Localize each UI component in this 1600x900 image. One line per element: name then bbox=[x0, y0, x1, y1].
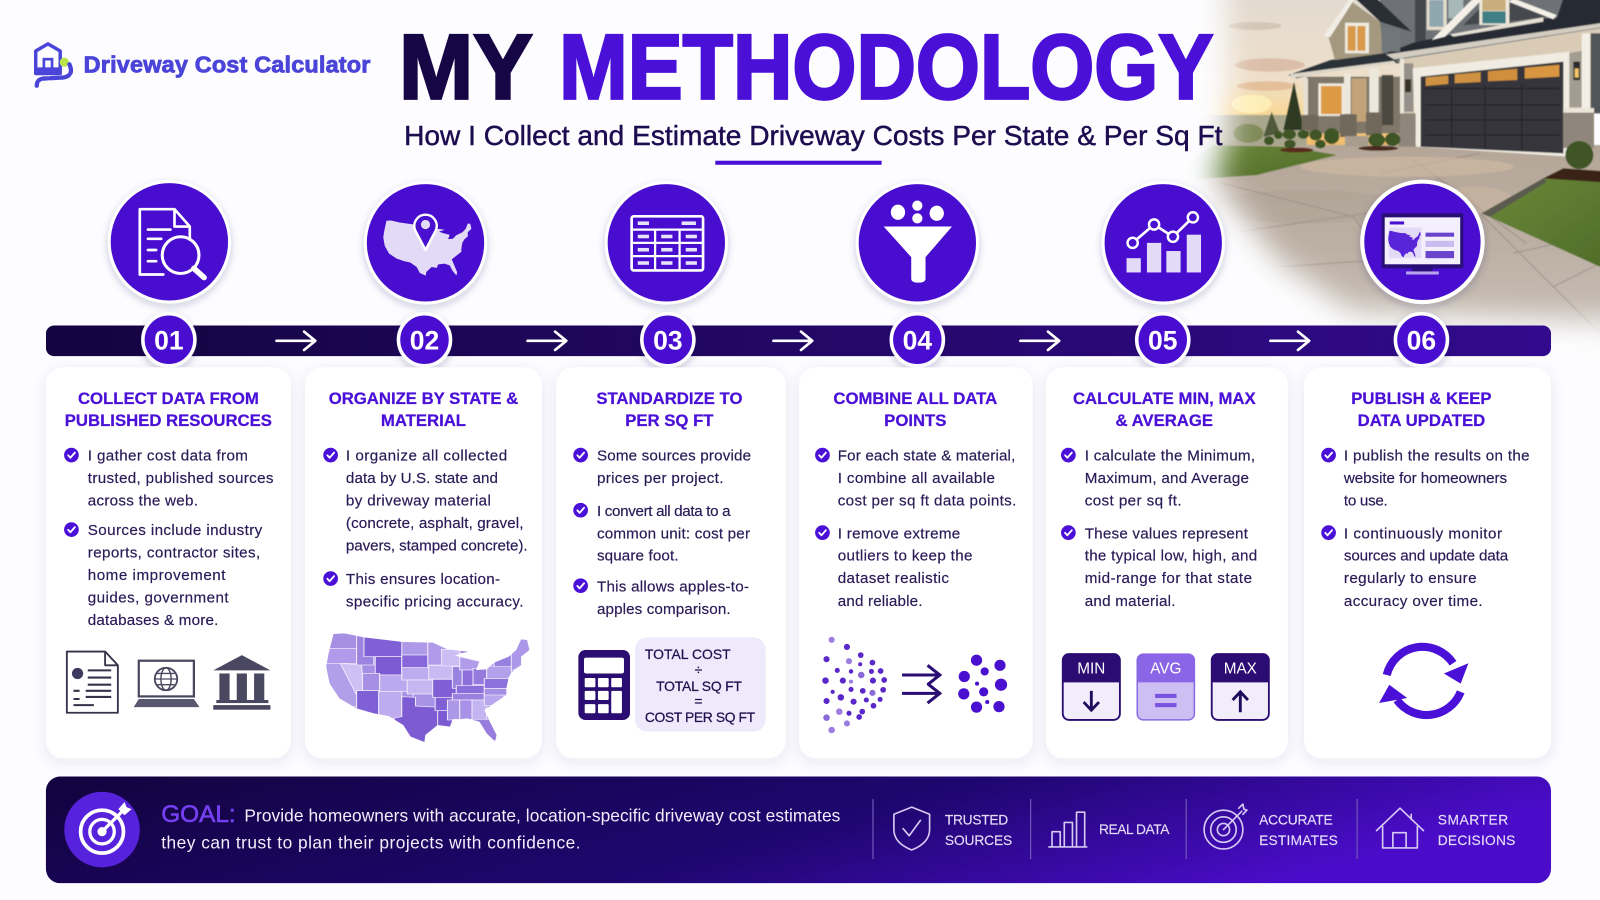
heading: COLLECT DATA FROM bbox=[78, 389, 259, 408]
MIN card bbox=[1063, 654, 1120, 720]
driveway bbox=[1200, 144, 1600, 338]
upper house wall bbox=[1380, 0, 1600, 63]
bullets: home improvement bbox=[88, 567, 226, 584]
panel: step 2 organize bbox=[305, 367, 542, 758]
photo: house and driveway at sunset bbox=[1195, 0, 1600, 338]
garage trim and door bbox=[1413, 52, 1569, 157]
bullets: I remove extreme bbox=[838, 525, 960, 542]
logo bbox=[36, 44, 370, 86]
bullets: I combine all available bbox=[838, 470, 995, 487]
step number 05: 05 bbox=[1148, 325, 1178, 355]
bullets: trusted, published sources bbox=[88, 470, 274, 487]
bullets: and material. bbox=[1085, 593, 1176, 610]
title: METHODOLOGY bbox=[559, 16, 1213, 118]
arrow 4 bbox=[1020, 332, 1059, 350]
icon: laptop with globe bbox=[134, 661, 199, 707]
porch bbox=[1307, 77, 1400, 133]
panel: step 5 calculate bbox=[1046, 367, 1288, 758]
bullets bbox=[1321, 448, 1530, 610]
bullets: This ensures location- bbox=[346, 571, 500, 588]
bullets: databases & more. bbox=[88, 612, 218, 629]
step number 06 bbox=[1395, 314, 1447, 366]
lower front wall bbox=[1400, 27, 1600, 115]
icon: goal target bbox=[64, 792, 140, 867]
logo wordmark: Driveway Cost Calculator bbox=[84, 51, 370, 77]
bullets: mid-range for that state bbox=[1085, 570, 1252, 587]
subtitle underline bbox=[715, 161, 882, 165]
bullets: I gather cost data from bbox=[88, 448, 248, 465]
bushes bbox=[1264, 128, 1593, 169]
bullets: to use. bbox=[1344, 493, 1388, 510]
icon circle 3: data table bbox=[606, 183, 727, 303]
main roof bbox=[1382, 0, 1600, 57]
step number 04: 04 bbox=[903, 325, 932, 355]
panel: step 3 standardize bbox=[556, 367, 786, 758]
formula box: TOTAL COST bbox=[645, 646, 731, 662]
bullets: prices per project. bbox=[597, 470, 723, 487]
heading: STANDARDIZE TO bbox=[596, 389, 742, 408]
bullets: I continuously monitor bbox=[1344, 525, 1502, 542]
badge: smarter decisions bbox=[1377, 808, 1515, 848]
bullets: sources and update data bbox=[1344, 548, 1509, 565]
goal statement: Provide homeowners with accurate, location-specific driveway cost estimates bbox=[244, 805, 841, 825]
icon: document bbox=[67, 652, 118, 713]
bullets: regularly to ensure bbox=[1344, 570, 1477, 587]
bullets: by driveway material bbox=[346, 493, 491, 510]
bullets bbox=[573, 448, 751, 618]
heading: COMBINE ALL DATA bbox=[833, 389, 997, 408]
badge: smarter decisions: DECISIONS bbox=[1438, 833, 1515, 848]
bullets: outliers to keep the bbox=[838, 548, 972, 565]
stone bases bbox=[1398, 113, 1416, 147]
combined data dots bbox=[958, 655, 1007, 713]
bullets: Maximum, and Average bbox=[1085, 470, 1249, 487]
bullets: and reliable. bbox=[838, 593, 922, 610]
bullets: dataset realistic bbox=[838, 570, 949, 587]
formula box: ÷ bbox=[695, 661, 703, 677]
bullets: pavers, stamped concrete). bbox=[346, 538, 528, 555]
US map by state bbox=[326, 634, 530, 742]
bullets: specific pricing accuracy. bbox=[346, 594, 523, 611]
title: MY bbox=[399, 16, 533, 118]
goal statement: GOAL: bbox=[161, 801, 236, 828]
badge: accurate estimates: ACCURATE bbox=[1259, 812, 1333, 827]
heading: PUBLISH & KEEP bbox=[1351, 389, 1492, 408]
icon circle 4: funnel bbox=[857, 183, 978, 303]
goal statement: they can trust to plan their projects with confidence. bbox=[161, 832, 581, 852]
badge: trusted sources: SOURCES bbox=[945, 833, 1012, 848]
icon circle 6: monitor with website bbox=[1362, 182, 1483, 302]
heading: MATERIAL bbox=[381, 411, 466, 430]
bullets: website for homeowners bbox=[1343, 470, 1508, 487]
step number 04 bbox=[891, 314, 943, 366]
double arrow bbox=[902, 665, 940, 703]
panel: step 1 collect data bbox=[46, 367, 291, 758]
arrow 2 bbox=[528, 332, 566, 350]
bullets: (concrete, asphalt, gravel, bbox=[346, 515, 523, 532]
step number 01 bbox=[143, 314, 195, 366]
bullets bbox=[64, 448, 274, 629]
formula box: = bbox=[694, 693, 703, 709]
right lawn bbox=[1482, 178, 1600, 270]
panel: step 6 publish bbox=[1304, 367, 1551, 758]
arrow 3 bbox=[773, 332, 812, 350]
MIN card: MIN bbox=[1077, 660, 1105, 677]
bullets: the typical low, high, and bbox=[1085, 548, 1257, 565]
bullets bbox=[1061, 448, 1257, 610]
heading: CALCULATE MIN, MAX bbox=[1073, 389, 1256, 408]
bullets: For each state & material, bbox=[838, 448, 1015, 465]
left lawn bbox=[1200, 145, 1336, 178]
arrow 5 bbox=[1270, 332, 1309, 350]
step number 02 bbox=[398, 314, 451, 366]
heading: DATA UPDATED bbox=[1358, 411, 1485, 430]
bullets: accuracy over time. bbox=[1344, 593, 1483, 610]
bullets: These values represent bbox=[1085, 525, 1249, 542]
bullets: cost per sq ft data points. bbox=[838, 493, 1016, 510]
bullets: I publish the results on the bbox=[1344, 448, 1530, 465]
badge: real data: REAL DATA bbox=[1099, 822, 1170, 837]
bullets: apples comparison. bbox=[597, 601, 731, 618]
bullets: data by U.S. state and bbox=[346, 470, 498, 487]
scattered data dots bbox=[822, 637, 887, 733]
icon: calculator bbox=[578, 650, 630, 720]
step number 05 bbox=[1137, 314, 1189, 366]
bullets: Sources include industry bbox=[88, 522, 263, 539]
upper gable bbox=[1328, 2, 1383, 60]
bullets: common unit: cost per bbox=[597, 525, 750, 542]
bullets: I calculate the Minimum, bbox=[1085, 448, 1255, 465]
heading: ORGANIZE BY STATE & bbox=[329, 389, 518, 408]
panel: step 4 combine bbox=[799, 367, 1033, 758]
bullets: I convert all data to a bbox=[597, 503, 731, 520]
bullets bbox=[815, 448, 1016, 610]
step number 02: 02 bbox=[410, 325, 439, 355]
MAX card bbox=[1212, 654, 1269, 720]
heading: PUBLISHED RESOURCES bbox=[65, 411, 272, 430]
bullets: I organize all collected bbox=[346, 448, 507, 465]
step number 06: 06 bbox=[1407, 325, 1436, 355]
badge: trusted sources: TRUSTED bbox=[945, 812, 1008, 827]
step number 03 bbox=[642, 314, 694, 366]
bullets: Some sources provide bbox=[597, 448, 751, 465]
badge: accurate estimates: ESTIMATES bbox=[1259, 833, 1338, 848]
badge: accurate estimates bbox=[1204, 804, 1338, 849]
subtitle: How I Collect and Estimate Driveway Costs Per State & Per Sq Ft bbox=[404, 120, 1223, 151]
AVG card: AVG bbox=[1150, 660, 1181, 677]
formula box bbox=[635, 637, 766, 732]
step number 03: 03 bbox=[653, 325, 683, 355]
goal banner bbox=[46, 777, 1551, 883]
heading: & AVERAGE bbox=[1116, 411, 1213, 430]
arrow 1 bbox=[277, 332, 315, 350]
timeline bar bbox=[46, 314, 1551, 366]
bullets: square foot. bbox=[597, 548, 679, 565]
heading: PER SQ FT bbox=[625, 411, 714, 430]
icon circle 1: document search bbox=[109, 182, 230, 302]
icon: refresh arrows bbox=[1379, 647, 1468, 715]
bullets: guides, government bbox=[88, 590, 229, 607]
bullets: cost per sq ft. bbox=[1085, 493, 1182, 510]
icon: government building bbox=[213, 655, 270, 710]
step number 01: 01 bbox=[154, 325, 184, 355]
bullets: This allows apples-to- bbox=[597, 578, 749, 595]
bullets: across the web. bbox=[88, 493, 198, 510]
badge: trusted sources bbox=[894, 807, 1012, 850]
heading: POINTS bbox=[884, 411, 946, 430]
badge: real data bbox=[1049, 812, 1170, 847]
formula box: COST PER SQ FT bbox=[645, 709, 756, 725]
bullets bbox=[323, 448, 528, 611]
bullets: reports, contractor sites, bbox=[88, 545, 260, 562]
formula box: TOTAL SQ FT bbox=[656, 678, 742, 694]
badge: smarter decisions: SMARTER bbox=[1438, 812, 1508, 827]
icon circle 5: bar and line chart bbox=[1103, 183, 1223, 303]
AVG card bbox=[1137, 654, 1194, 720]
icon circle 2: US map with pin bbox=[365, 183, 486, 303]
goal statement bbox=[161, 801, 841, 852]
MAX card: MAX bbox=[1224, 660, 1257, 677]
